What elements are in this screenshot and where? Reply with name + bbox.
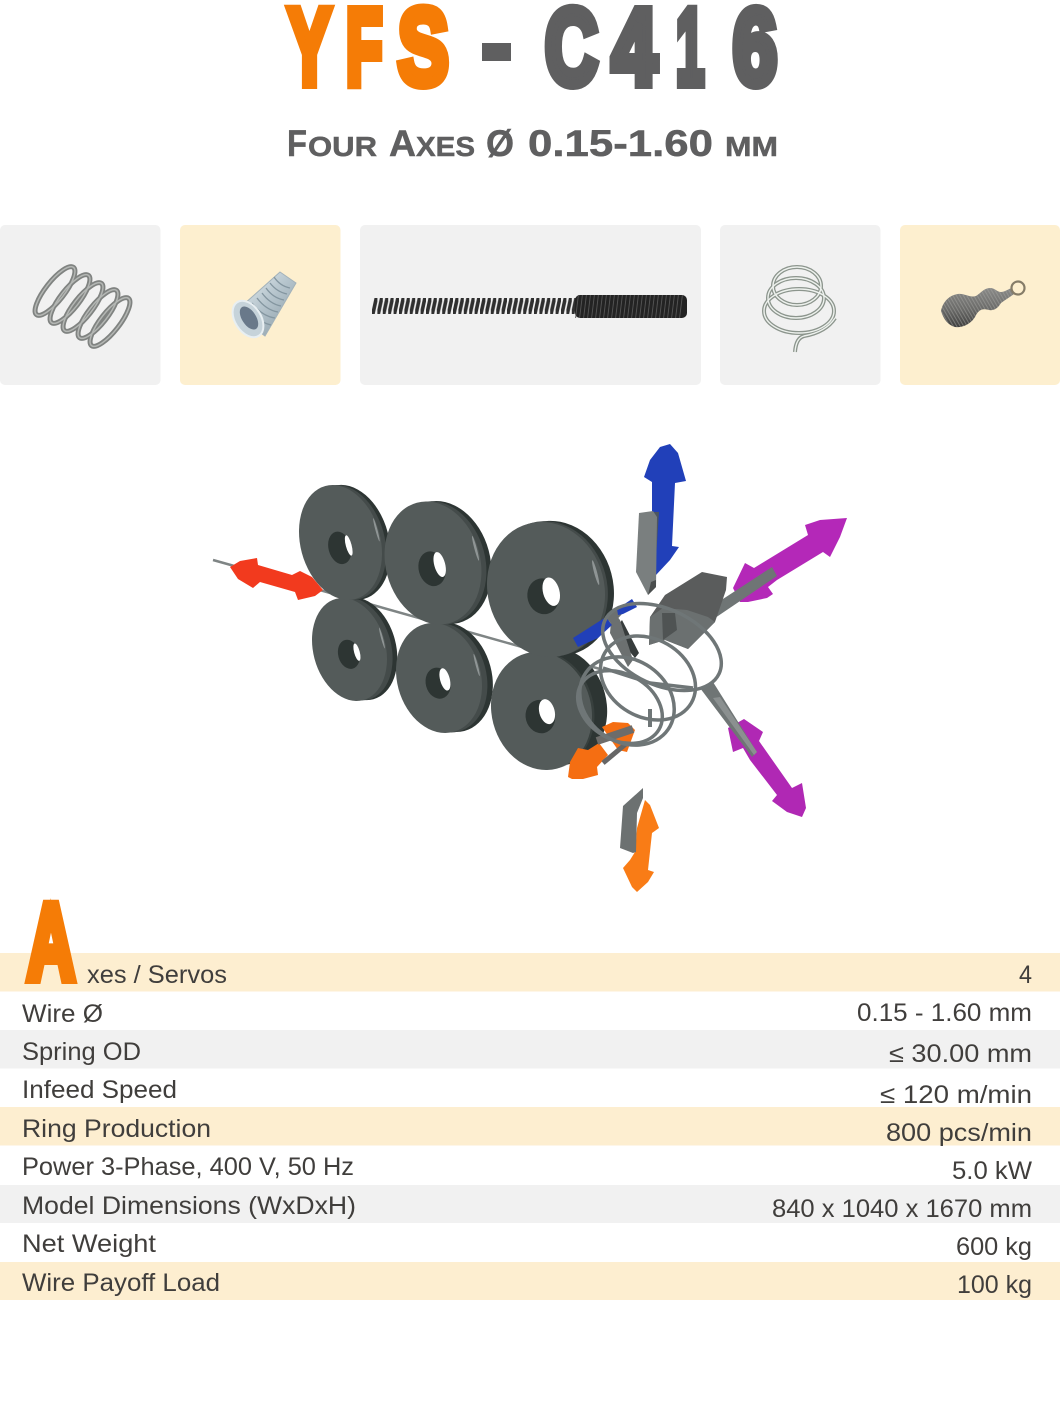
row bands [0, 953, 1060, 1300]
row: net weight [22, 1230, 1032, 1261]
wheel bottom 1 [301, 587, 408, 711]
subtitle: A [389, 123, 416, 164]
panel: gourd spring [900, 225, 1060, 385]
row: wire diameter: Wire Ø [22, 1000, 103, 1028]
row: spring OD [22, 1038, 1032, 1068]
arrow: orange lower [623, 800, 659, 892]
wheel top 2 [371, 488, 505, 638]
subtitle: XES [416, 131, 475, 162]
icon: conical spring [226, 272, 296, 343]
panel: conical spring [180, 225, 340, 385]
row: infeed speed [22, 1076, 1032, 1109]
subtitle: MM [725, 131, 778, 162]
row: axes / servos: xes / Servos [87, 961, 227, 989]
wheel top 1 [287, 474, 403, 611]
panel: long spring [360, 225, 701, 385]
subtitle: OUR [308, 131, 377, 162]
row: wire payoff load: 100 kg [957, 1271, 1032, 1299]
diagram: four axes wire forming [213, 444, 847, 892]
icon: tapered spiral spring [764, 267, 835, 352]
row: net weight: Net Weight [22, 1230, 156, 1258]
row: net weight: 600 kg [956, 1233, 1032, 1261]
blade: upper grey [636, 511, 659, 595]
arrow: blue small [573, 599, 637, 647]
row: model dimensions: Model Dimensions (WxDxH) [22, 1192, 356, 1220]
title [288, 0, 777, 107]
large initial A: A [27, 881, 75, 1002]
row: ring production: Ring Production [22, 1115, 211, 1143]
panel: tapered spiral spring [720, 225, 880, 385]
row: power: 5.0 kW [952, 1157, 1032, 1185]
row: model dimensions: 840 x 1040 x 1670 mm [772, 1195, 1032, 1223]
wire [213, 560, 600, 669]
row: power: Power 3-Phase, 400 V, 50 Hz [22, 1153, 354, 1181]
arrow: magenta upper [733, 518, 847, 602]
row: wire diameter [22, 999, 1032, 1028]
icon: compression spring [29, 262, 136, 351]
row: wire payoff load [22, 1269, 1032, 1299]
blade: lower grey [620, 788, 643, 853]
row: spring OD: ≤ 30.00 mm [889, 1040, 1032, 1068]
row: infeed speed: Infeed Speed [22, 1076, 177, 1104]
arrow: magenta lower [728, 719, 806, 817]
row: model dimensions [22, 1192, 1032, 1223]
tool block [649, 572, 727, 649]
icon: gourd spring [941, 282, 1024, 327]
tool arm: upper [703, 567, 777, 618]
subtitle: F [287, 123, 307, 164]
arrow: blue vertical [644, 444, 686, 575]
row: axes / servos: 4 [1019, 961, 1032, 989]
row: power [22, 1153, 1032, 1185]
wheel bottom 3 [478, 635, 620, 781]
row: infeed speed: ≤ 120 m/min [880, 1081, 1032, 1109]
icon: long spring [372, 295, 687, 318]
tool arm: lower [700, 682, 757, 757]
subtitle: Ø [486, 123, 514, 164]
row: spring OD: Spring OD [22, 1038, 141, 1066]
subtitle [287, 123, 778, 164]
tool arm: dark behind [610, 610, 639, 667]
row: ring production: 800 pcs/min [886, 1119, 1032, 1147]
wheel bottom 2 [384, 610, 505, 745]
wheel top 3 [472, 506, 629, 671]
coil rings [563, 586, 735, 763]
subtitle: 0.15-1.60 [528, 123, 713, 164]
panel: compression spring [0, 225, 160, 385]
row: wire diameter: 0.15 - 1.60 mm [857, 999, 1032, 1027]
row: axes / servos [87, 961, 1032, 989]
row: wire payoff load: Wire Payoff Load [22, 1269, 220, 1297]
specification table [0, 881, 1060, 1300]
arrow: red infeed [230, 558, 323, 600]
arrow: orange small [568, 722, 635, 779]
row: ring production [22, 1115, 1032, 1147]
